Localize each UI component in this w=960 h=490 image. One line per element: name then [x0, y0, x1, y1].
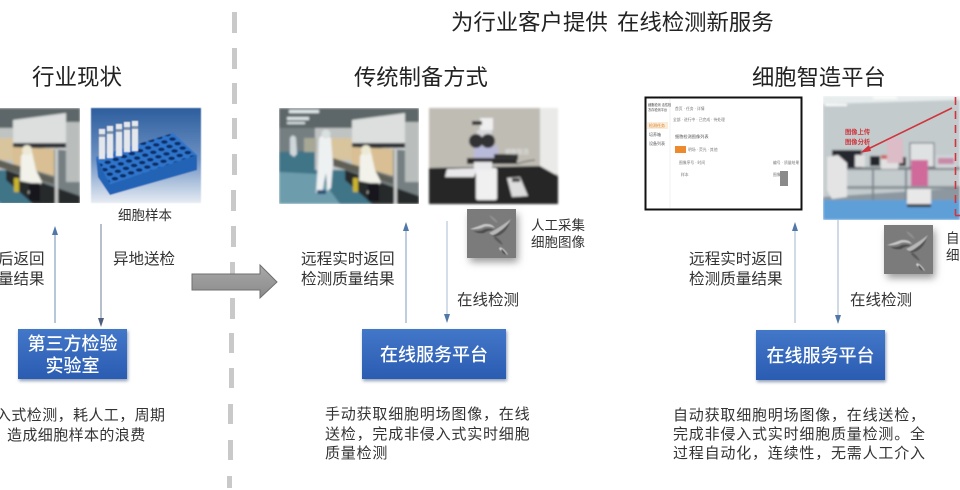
screenshot: software interface: 首页 · 任务 · 详情 [675, 106, 705, 111]
label: real-time results: 检测质量结果 [689, 270, 783, 288]
label: manual capture [531, 218, 585, 250]
box: online service platform: 在线服务平台 [380, 345, 488, 365]
red annotation arrow and dashed frame: 图像上传 [845, 127, 871, 136]
description: platform benefits: 过程自动化，连续性，无需人工介入 [673, 445, 926, 462]
label: real-time results: 远程实时返回 [689, 250, 783, 268]
label: manual capture: 细胞图像 [531, 235, 585, 250]
screenshot: software interface: 图像序号 · 时间 [679, 160, 705, 165]
screenshot: software interface: 培养箱 [649, 131, 661, 137]
box: third-party lab [18, 329, 128, 381]
label: results returned [0, 250, 45, 288]
photo: clean room lab [0, 108, 80, 204]
screenshot: software interface: 细胞检测 活性检 [648, 102, 672, 107]
red annotation arrow and dashed frame [845, 97, 960, 216]
screenshot: software interface: 设备列表 [649, 140, 665, 146]
label: online inspection: 在线检测 [457, 291, 519, 309]
arrow: results returned [792, 222, 798, 323]
screenshot: software interface: 样本 [681, 172, 689, 177]
description: platform benefits: 自动获取细胞明场图像，在线送检， [673, 407, 926, 424]
image: cell micrograph with shadow [884, 225, 935, 278]
description: third-party drawbacks [0, 407, 165, 444]
box: third-party lab: 第三方检验 [28, 333, 118, 354]
arrow: transition to online [192, 265, 277, 298]
screenshot: software interface: 编号 · 质量结果 [773, 160, 799, 165]
arrow: online inspection [444, 221, 450, 323]
panel: traditional method [279, 65, 585, 462]
screenshot: software interface [646, 98, 802, 210]
photo: clean room lab [279, 108, 419, 204]
screenshot: software interface: 全部 · 进行中 · 已完成 · 待处理 [673, 117, 725, 122]
box: online service platform: 在线服务平台 [766, 346, 874, 366]
description: third-party drawbacks: 造成细胞样本的浪费 [7, 427, 146, 444]
box: online service platform [756, 330, 886, 382]
red annotation arrow and dashed frame: 图像分析 [845, 137, 871, 146]
screenshot: software interface: 细胞检测图像列表 [675, 133, 709, 140]
screenshot: software interface: 明场 · 荧光 · 其他 [688, 147, 718, 152]
arrow: online inspection [835, 220, 841, 324]
screenshot: software interface: 图像 [773, 172, 781, 177]
label: online inspection: 在线检测 [850, 291, 912, 309]
caption: cell sample: 细胞样本 [118, 208, 172, 223]
screenshot: software interface: 冻存检测平台 [648, 107, 667, 112]
box: online service platform [362, 329, 507, 381]
photo: blue sample rack [91, 108, 201, 203]
description: traditional method: 手动获取细胞明场图像，在线 [325, 406, 530, 423]
label: manual capture: 人工采集 [531, 218, 585, 233]
label: real-time results: 远程实时返回 [301, 250, 395, 268]
description: third-party drawbacks: 入式检测，耗人工，周期 [0, 407, 165, 424]
divider: dashed vertical line [227, 12, 237, 488]
label: automatic capture [946, 231, 960, 263]
heading: industry status: 行业现状 [32, 65, 122, 90]
heading: traditional method: 传统制备方式 [354, 65, 488, 90]
screenshot: software interface: 检测任务 [649, 122, 665, 128]
label: off-site delivery: 异地送检 [113, 250, 175, 268]
description: platform benefits [673, 407, 926, 462]
photo: microscope [429, 108, 558, 204]
description: traditional method [325, 406, 530, 462]
label: real-time results [301, 250, 395, 288]
panel: industry status [0, 65, 201, 444]
photo: automated equipment room [823, 96, 960, 220]
heading: cell manufacturing platform: 细胞智造平台 [752, 65, 886, 90]
panel: cell manufacturing platform [646, 65, 960, 462]
arrow: results returned [52, 226, 58, 323]
label: real-time results [689, 250, 783, 288]
photo: microscope: 细胞智造 [505, 148, 529, 156]
box: third-party lab: 实验室 [46, 356, 100, 376]
description: traditional method: 质量检测 [325, 445, 388, 462]
description: platform benefits: 完成非侵入式实时细胞质量检测。全 [673, 425, 926, 443]
label: real-time results: 检测质量结果 [301, 270, 395, 288]
image: cell micrograph with shadow [467, 209, 518, 262]
description: traditional method: 送检，完成非侵入式实时细胞 [325, 426, 530, 443]
arrow: off-site delivery [98, 224, 104, 327]
arrow: results returned [403, 222, 409, 323]
main title: 为行业客户提供 在线检测新服务 [451, 10, 774, 35]
